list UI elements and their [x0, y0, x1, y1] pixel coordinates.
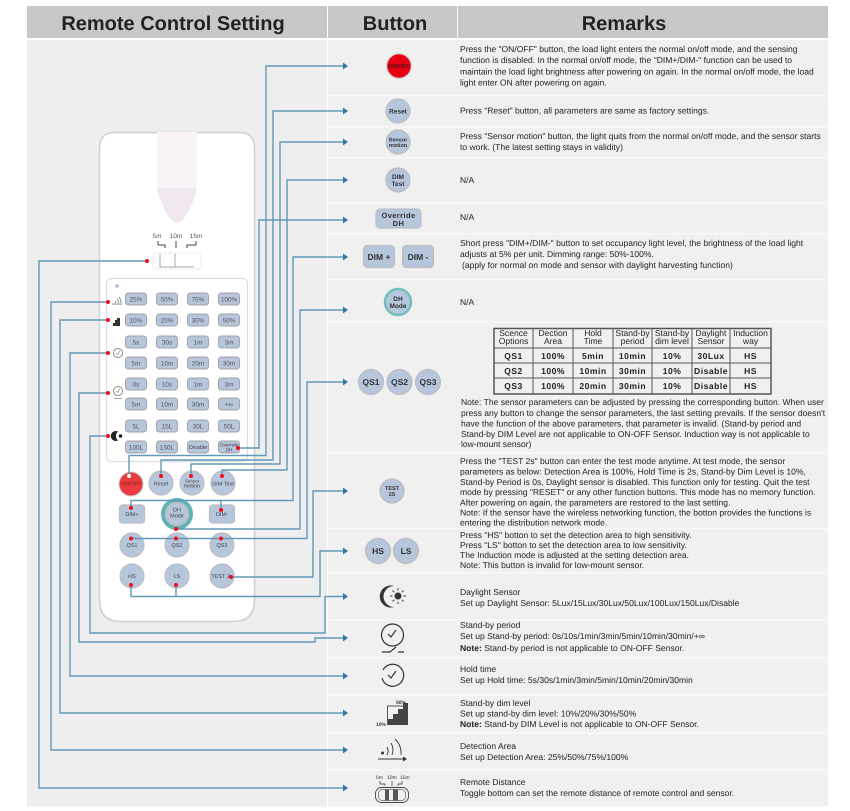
parameter keys: 10m: [161, 360, 173, 368]
button: DH Mode: Mode: [390, 303, 407, 310]
icon: remote distance: 5m: [376, 775, 383, 781]
parameter keys: 100%: [221, 296, 237, 304]
scene options table: 30min: [619, 366, 646, 376]
remark: Remote Distance: [460, 777, 734, 798]
scene options table: 10min: [579, 366, 607, 376]
remark: Override DH: N/A: [460, 212, 475, 222]
buttons: HS LS: LS: [401, 546, 412, 556]
remark: QS note: low-mount sensor): [461, 439, 531, 449]
remark: ON/OFF: function is disabled. In the normal on/off mode, the "DIM+/DIM-" function can be used to: [460, 55, 792, 65]
scene options table: dim level: [655, 336, 689, 346]
function keys: LS: [174, 574, 181, 580]
scene options table: Area: [544, 336, 562, 346]
buttons: HS LS: HS: [372, 546, 384, 556]
scene options table: Induction: [733, 328, 768, 338]
button: DIM Test: [386, 168, 410, 192]
remark: HS LS: Press "HS" botton to set the detection area to high sensitivity.: [460, 530, 692, 540]
parameter keys: 5s: [133, 340, 139, 346]
scene options table: Dection: [539, 328, 568, 338]
buttons: QS1 QS2 QS3: QS2: [391, 377, 408, 387]
button: Override DH: DH: [393, 219, 404, 228]
remark: Stand-by period: [460, 620, 705, 653]
scene options table: QS2: [504, 366, 523, 376]
scene options table: way: [742, 336, 759, 346]
remark: Reset: Press "Reset" button, all parameters are same as factory settings.: [460, 106, 709, 116]
remark: ON/OFF: [460, 44, 814, 88]
parameter keys: [126, 293, 240, 454]
heading: Remote Control Setting: Remote Control Setting: [61, 13, 285, 35]
scene options table: 10min: [619, 351, 646, 361]
heading: Remarks: Remarks: [582, 13, 666, 35]
icon: daylight sensor: [380, 586, 406, 607]
icon: remote distance: [376, 775, 410, 802]
parameter keys: 30m: [223, 360, 235, 368]
remarks text: [460, 44, 826, 798]
scene options table: Stand-by: [615, 328, 650, 338]
parameter panel: [106, 278, 248, 462]
parameter keys: DH: [226, 448, 233, 454]
remark: Stand-by period: Stand-by period: [460, 620, 521, 630]
distance selector: [153, 233, 202, 269]
button: Override DH: Override: [381, 211, 416, 220]
scene options table: 100%: [541, 351, 565, 361]
distance selector: 5m: [153, 233, 161, 240]
remark: DIM+/DIM-: adjusts at 5% per unit. Dimming range: 50%-100%.: [460, 249, 654, 259]
parameter keys: 1m: [194, 382, 202, 388]
scene options table: 10%: [663, 366, 681, 376]
function keys: DH: [173, 508, 181, 514]
button: ON/OFF: [386, 54, 412, 78]
parameter keys: 10s: [162, 382, 172, 388]
remark: Remote Distance: Remote Distance: [460, 777, 526, 787]
distance selector: 10m: [170, 233, 182, 240]
remark: ON/OFF: maintain the load light brightness after powering on again. In the normal on/off mode, the load: [460, 66, 814, 76]
remark: TEST 2s: Note: If the sensor have the wireless networking function, the botton provides the functions is: [460, 508, 811, 518]
remark: TEST 2s: entering the distribution network mode.: [460, 518, 607, 528]
scene options table: QS1: [504, 351, 523, 361]
parameter keys: 30%: [192, 318, 205, 324]
parameter keys: +∞: [225, 402, 234, 408]
remark: QS note: press any button to change the sensor parameters, the last setting prevails. If the sensor doesn't: [461, 408, 826, 418]
button: Sensor motion: Sensor: [389, 138, 408, 144]
parameter keys: 1m: [194, 340, 202, 346]
function keys: Reset: [154, 482, 169, 488]
icon: detection area: [378, 739, 407, 762]
remark: Stand-by period: Set up Stand-by period: 0s/10s/1min/3min/5min/10min/30min/+∞: [460, 631, 705, 641]
function keys: motion: [184, 484, 200, 490]
scene options table: 5min: [582, 351, 604, 361]
remark: Daylight Sensor: Set up Daylight Sensor: 5Lux/15Lux/30Lux/50Lux/100Lux/150Lux/Disable: [460, 598, 740, 608]
connector dots: [106, 259, 240, 587]
remark: TEST 2s: After powering on again, the parameters are restored to the last setting.: [460, 498, 730, 508]
function keys: Mode: [170, 514, 184, 520]
remark: HS LS: The Induction mode is adjusted at the setting detection area.: [460, 550, 689, 560]
function keys: QS1: [126, 543, 138, 549]
scene options table: 30Lux: [697, 351, 725, 361]
remark: Stand-by period: Note: Stand-by period is not applicable to ON-OFF Sensor.: [460, 643, 684, 653]
scene options table: HS: [744, 381, 757, 391]
sensor cone: [157, 132, 197, 223]
remark: QS note: have the function of the above parameters, that parameter is invalid. (Stand-by period and: [461, 418, 801, 428]
header bar: [27, 6, 828, 38]
parameter keys: 30s: [162, 340, 172, 346]
scene options table: 30min: [619, 381, 646, 391]
button: DIM+ DIM-: DIM +: [368, 252, 390, 262]
remark: Stand-by dim level: Stand-by dim level: [460, 698, 530, 708]
remark: TEST 2s: mode by pressing "RESET" or any other function buttons. This mode has no memory function.: [460, 487, 816, 497]
connector lines: [39, 66, 343, 788]
function keys: QS3: [216, 543, 228, 549]
remark: Detection Area: Set up Detection Area: 25%/50%/75%/100%: [460, 752, 629, 762]
icon: stand-by period: [382, 624, 404, 652]
icon: stand-by dim level: 50%: [396, 700, 407, 706]
parameter keys: 5L: [132, 424, 140, 430]
button: Reset: Reset: [389, 108, 408, 116]
scene options table: 20min: [579, 381, 607, 391]
parameter keys: 0s: [133, 382, 139, 388]
scene options table: 10%: [663, 381, 681, 391]
parameter keys: 150L: [160, 444, 175, 452]
parameter keys: 50%: [223, 318, 236, 324]
function keys: DIM+: [125, 512, 139, 518]
remark: ON/OFF: light enter ON after powering on again.: [460, 78, 607, 88]
remark: TEST 2s: Press the "TEST 2s" button can enter the test mode anytime. At test mode, the sensor: [460, 456, 785, 466]
scene options table: Options: [499, 336, 528, 346]
button: DH Mode: [385, 289, 411, 315]
function keys: [119, 471, 235, 588]
scene options table: period: [621, 336, 645, 346]
scene options table: Scence: [499, 328, 528, 338]
remark: Sensor motion: [460, 131, 821, 152]
remote control: [100, 132, 254, 622]
icon: stand-by dim level: 10%: [376, 722, 387, 728]
function keys: ON/OFF: [121, 482, 142, 488]
buttons: HS LS: [366, 538, 418, 564]
remark: DIM+/DIM-: Short press "DIM+/DIM-" button to set occupancy light level, the brightness of the load light: [460, 238, 804, 248]
buttons: QS1 QS2 QS3: [358, 370, 440, 394]
remark: TEST 2s: Stand-by Period is 0s, Daylight sensor is disabled. This function only for testing. Quit the test: [460, 477, 810, 487]
button: TEST 2S: TEST: [385, 486, 400, 492]
parameter keys: 15L: [162, 424, 173, 430]
scene options table: HS: [744, 366, 757, 376]
parameter keys: 50L: [224, 424, 235, 430]
parameter keys: 5m: [132, 402, 140, 408]
remark: QS note: Stand-by DIM Level are not applicable to ON-OFF Sensor. Induction way is not applicable to: [461, 429, 810, 439]
arrowheads: [343, 62, 348, 792]
parameter keys: 3m: [225, 382, 233, 388]
parameter keys: Disable: [189, 445, 207, 451]
button: ON/OFF: ON/OFF: [388, 63, 410, 70]
button: Reset: [386, 99, 410, 123]
button: DIM+ DIM-: [364, 246, 434, 268]
remark: DH Mode: N/A: [460, 297, 475, 307]
button: Sensor motion: [386, 130, 410, 154]
remark: ON/OFF: Press the "ON/OFF" button, the load light enters the normal on/off mode, and the sensing: [460, 44, 798, 54]
parameter keys: Override: [220, 442, 239, 448]
parameter icons: [111, 297, 122, 441]
scene options table: 10%: [663, 351, 681, 361]
button: Override DH: [376, 209, 421, 228]
function keys: TEST 2s: [211, 574, 233, 580]
scene options table: Daylight: [696, 328, 727, 338]
function keys: DIM Test: [212, 482, 234, 488]
parameter keys: 5m: [132, 360, 140, 368]
button: DH Mode: DH: [393, 296, 403, 303]
scene options table: Stand-by: [655, 328, 690, 338]
remark: QS note: Note: The sensor parameters can be adjusted by pressing the corresponding button. When user: [461, 397, 824, 407]
parameter keys: 30m: [192, 402, 204, 408]
function keys: HS: [128, 574, 136, 580]
parameter keys: 3m: [225, 340, 233, 346]
remark: QS note: [461, 397, 826, 449]
function keys: QS2: [171, 543, 183, 549]
parameter keys: 50%: [161, 296, 174, 304]
remark: Detection Area: Detection Area: [460, 741, 516, 751]
button: TEST 2S: 2S: [389, 492, 396, 498]
scene options table: Disable: [694, 366, 728, 376]
scene options table: [494, 328, 771, 394]
remark: Hold time: Hold time: [460, 664, 496, 674]
icon: remote distance: 10m: [387, 775, 397, 781]
buttons: QS1 QS2 QS3: QS3: [419, 377, 437, 387]
remark: Hold time: Set up Hold time: 5s/30s/1min/3min/5min/10min/20min/30min: [460, 675, 693, 685]
heading: Button: Button: [363, 13, 427, 35]
remark: Daylight Sensor: Daylight Sensor: [460, 587, 520, 597]
scene options table: HS: [744, 351, 757, 361]
remark: Stand-by dim level: Set up stand-by dim level: 10%/20%/30%/50%: [460, 708, 637, 718]
parameter keys: 25%: [130, 296, 143, 304]
remark: Sensor motion: to work. (The latest setting stays in validity): [460, 142, 623, 152]
scene options table: 100%: [541, 381, 565, 391]
remark: Hold time: [460, 664, 693, 685]
remark: TEST 2s: parameters as below: Detection Area is 100%, Hold Time is 2s, Stand-by Dim Level is 10%,: [460, 466, 806, 476]
remote body: [100, 132, 254, 622]
remark: HS LS: Press "LS" botton to set the detection area to low sensitivity.: [460, 540, 687, 550]
parameter keys: 20m: [192, 360, 204, 368]
button: TEST 2S: [380, 479, 404, 503]
function keys: DIM-: [216, 512, 228, 518]
remark: Stand-by dim level: Note: Stand-by DIM Level is not applicable to ON-OFF Sensor.: [460, 719, 699, 729]
parameter keys: 30L: [193, 424, 204, 430]
remark: Stand-by dim level: [460, 698, 699, 729]
button: Sensor motion: motion: [389, 143, 408, 149]
icon: hold time: [382, 664, 404, 686]
remark: TEST 2s: [460, 456, 816, 528]
parameter keys: 10%: [130, 318, 143, 324]
parameter keys: 20%: [161, 318, 174, 324]
remark: Detection Area: [460, 741, 629, 762]
button: DIM Test: Test: [392, 181, 405, 188]
remark: Sensor motion: Press "Sensor motion" button, the light quits from the normal on/off mode, and the sensor starts: [460, 131, 821, 141]
parameter keys: 75%: [192, 296, 205, 304]
icon: remote distance: 15m: [400, 775, 410, 781]
distance selector: 15m: [190, 233, 202, 240]
parameter keys: 100L: [129, 444, 144, 452]
parameter keys: 10m: [161, 402, 173, 408]
scene options table: Time: [584, 336, 603, 346]
button: DIM+ DIM-: DIM -: [408, 252, 429, 262]
scene options table: QS3: [504, 381, 523, 391]
remark: Remote Distance: Toggle bottom can set the remote distance of remote control and sensor.: [460, 788, 734, 798]
scene options table: 100%: [541, 366, 565, 376]
icon: stand-by dim level: [376, 700, 408, 728]
remark: Daylight Sensor: [460, 587, 740, 608]
remark: DIM+/DIM-: (apply for normal on mode and sensor with daylight harvesting function): [462, 260, 733, 270]
function keys: Sensor: [185, 478, 200, 484]
remark: DIM+/DIM-: [460, 238, 804, 270]
scene options table: Sensor: [697, 336, 725, 346]
buttons: QS1 QS2 QS3: QS1: [362, 377, 380, 387]
scene options table: Disable: [694, 381, 728, 391]
remark: DIM Test: N/A: [460, 175, 475, 185]
remark: HS LS: [460, 530, 692, 570]
button: DIM Test: DIM: [392, 174, 404, 181]
remark: HS LS: Note: This button is invalid for low-mount sensor.: [460, 560, 644, 570]
scene options table: Hold: [584, 328, 602, 338]
